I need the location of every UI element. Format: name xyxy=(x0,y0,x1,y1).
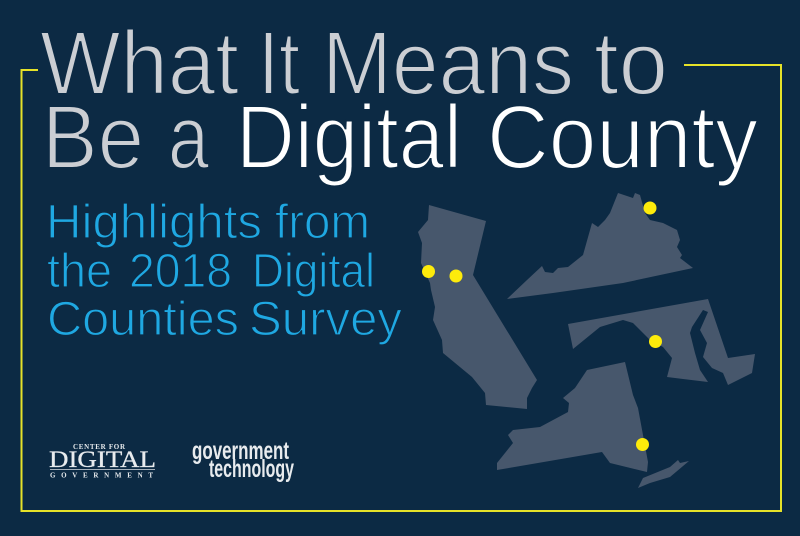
title: What xyxy=(40,14,239,114)
title: a xyxy=(168,88,210,188)
subtitle xyxy=(46,196,402,346)
subtitle: Digital xyxy=(252,245,375,298)
title: to xyxy=(594,14,668,114)
state map: California xyxy=(418,205,537,409)
subtitle: the xyxy=(47,245,112,298)
state map: Virginia xyxy=(507,193,693,299)
title: It xyxy=(258,14,300,114)
title: County xyxy=(487,88,758,188)
title: Be xyxy=(42,88,144,188)
state map: New York xyxy=(497,362,648,472)
subtitle: Highlights xyxy=(46,196,262,249)
logo: Center for Digital Government: DIGITAL xyxy=(49,447,156,472)
subtitle: from xyxy=(275,196,370,249)
subtitle: 2018 xyxy=(129,245,232,298)
logo: Government Technology: technology xyxy=(209,455,294,483)
subtitle: Counties xyxy=(47,293,239,346)
title: Digital xyxy=(236,88,462,188)
logo: Center for Digital Government xyxy=(49,443,156,480)
title: Means xyxy=(322,14,574,114)
state map: Long Island xyxy=(638,460,689,488)
state map: Maryland xyxy=(568,299,755,385)
logo: Government Technology xyxy=(192,437,294,483)
location markers xyxy=(422,202,662,451)
logo: Government Technology: government xyxy=(192,437,289,465)
title xyxy=(40,14,758,188)
yellow frame xyxy=(22,65,781,511)
subtitle: Survey xyxy=(249,293,402,346)
logo: Center for Digital Government: GOVERNMENT xyxy=(50,472,153,480)
logo: Center for Digital Government: CENTER FOR xyxy=(73,443,126,451)
